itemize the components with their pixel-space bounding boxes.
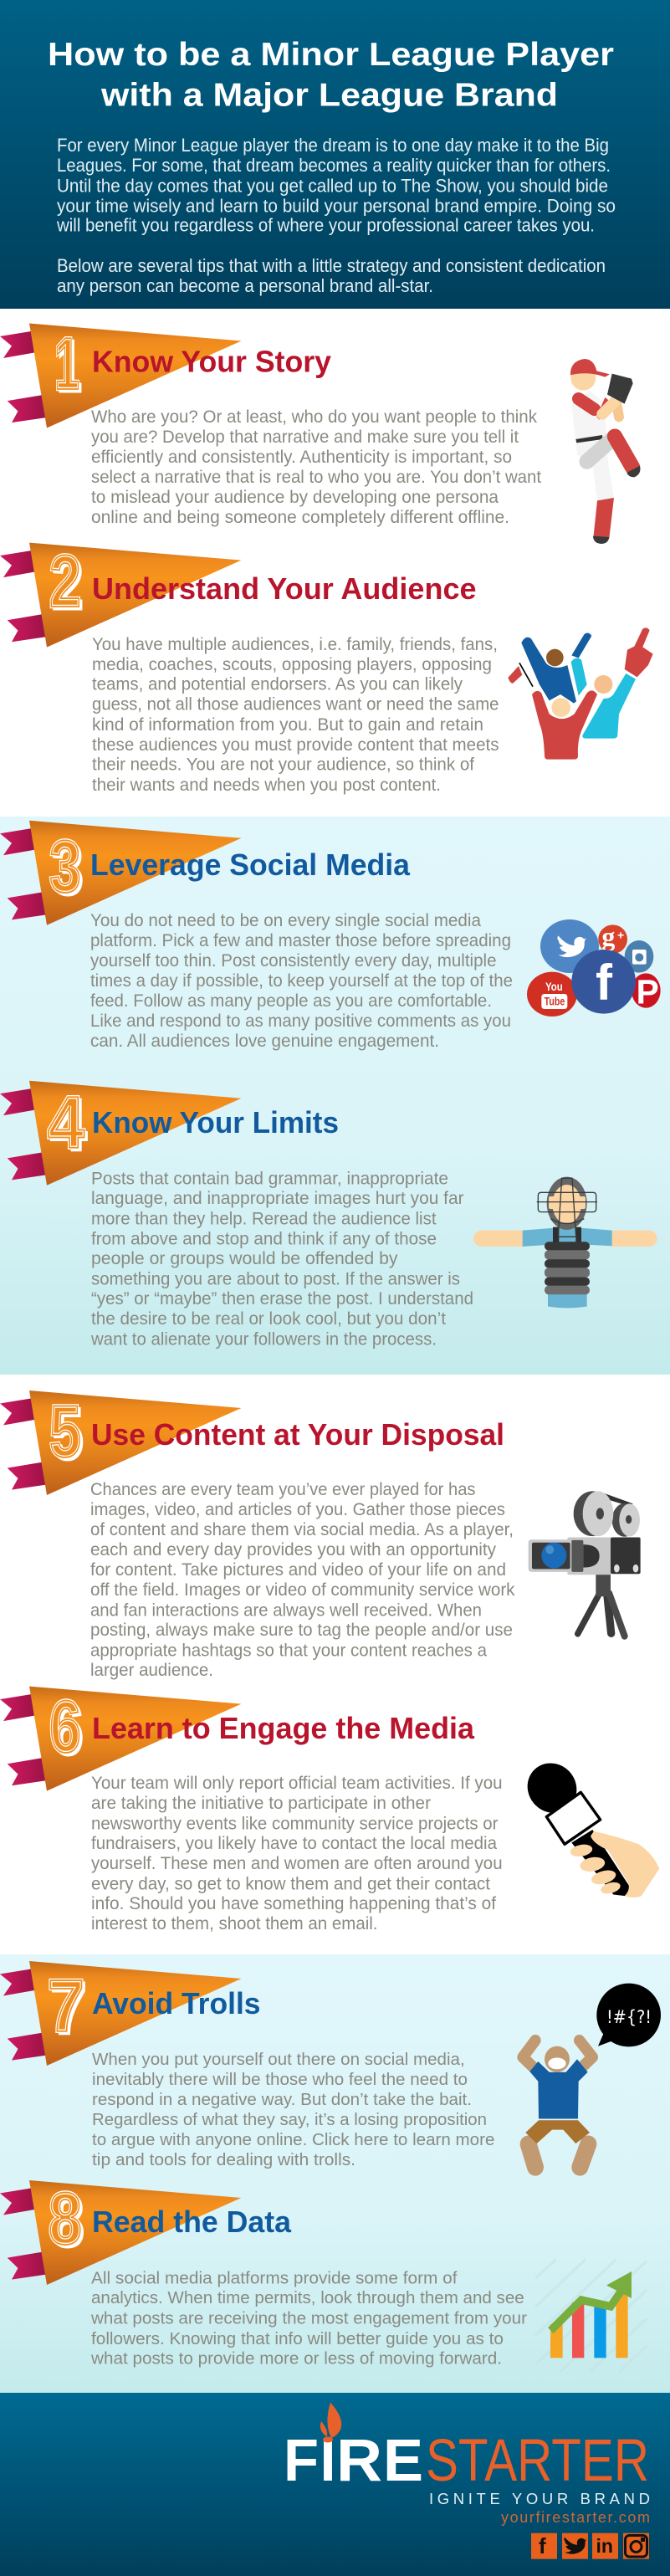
body text: inevitably there will be those who feel the need to (92, 2071, 468, 2089)
pennant with number 4: 4 (48, 1081, 84, 1164)
icon: angry troll with speech bubble: !#{?! (606, 2007, 652, 2027)
icon: cheering fans (508, 627, 653, 760)
body text: their needs. You are not your audience, so think of (92, 755, 474, 775)
body text: the desire to be real or look cool, but you don’t (91, 1308, 446, 1329)
website: yourfirestarter.com (501, 2509, 650, 2526)
tagline: IGNITE YOUR BRAND (429, 2490, 650, 2507)
body text: fundraisers, you likely have to contact the local media (91, 1833, 497, 1853)
intro text: any person can become a personal brand all-star. (57, 275, 433, 296)
pennant with number 8: 8 (49, 2177, 82, 2260)
body text: You have multiple audiences, i.e. family, friends, fans, (92, 634, 498, 654)
body text: people or groups would be offended by (91, 1248, 398, 1268)
intro text: Until the day comes that you get called up to The Show, you should bide (57, 175, 608, 196)
light blue background: tips 3 and 4 (0, 817, 670, 1375)
heading: Leverage Social Media (90, 848, 411, 882)
body text (90, 1479, 515, 1680)
body text: followers. Knowing that info will better guide you as to (91, 2330, 504, 2348)
panel: tip 4 (0, 1081, 657, 1349)
pennant with number 2: 2 (49, 540, 81, 622)
body text: to mislead your audience by developing one persona (91, 487, 499, 507)
body text: larger audience. (90, 1660, 213, 1680)
body text: of content and share them via social media. As a player, (90, 1519, 514, 1539)
light blue background: tips 7 and 8 (0, 1954, 670, 2393)
pennant with number 1 (0, 322, 241, 428)
icon: umpire (473, 1177, 657, 1308)
footer panel (0, 2393, 670, 2576)
logo: Firestarter (284, 2403, 649, 2494)
body text: online and being someone completely different offline. (91, 507, 509, 527)
heading: Use Content at Your Disposal (91, 1417, 504, 1452)
body text: you are? Develop that narrative and make sure you tell it (91, 427, 519, 447)
heading: Avoid Trolls (92, 1986, 261, 2020)
logo: Firestarter: I (320, 2428, 336, 2494)
body text: Posts that contain bad grammar, inappropriate (91, 1168, 448, 1188)
heading: Know Your Limits (92, 1105, 339, 1139)
intro text (56, 135, 616, 296)
pennant with number 6: 6 (49, 1685, 81, 1768)
icon: social media bubbles: + (617, 929, 624, 942)
pennant with number 5: 5 (52, 1392, 84, 1475)
heading: Learn to Engage the Media (92, 1711, 475, 1745)
heading: Know Your Story (92, 345, 331, 379)
body text: guess, not all those audiences want or need the same (92, 694, 499, 714)
pennant with number 5 (0, 1390, 241, 1495)
panel: tip 6 (0, 1685, 659, 1933)
panel: tip 7 (0, 1961, 661, 2169)
icon: social media bubbles: P (637, 972, 659, 1011)
icon: social media bubbles (527, 919, 661, 1017)
body text: When you put yourself out there on social media, (92, 2051, 465, 2069)
body text: something you are about to post. If the answer is (91, 1268, 460, 1288)
intro text: Leagues. For some, that dream becomes a reality quicker than for others. (57, 155, 611, 176)
panel: tip 2 (0, 540, 653, 795)
pennant with number 1: 1 (54, 322, 79, 405)
pennant with number 3: 3 (49, 825, 81, 908)
icon: social media bubbles: You (545, 980, 563, 993)
social icons (531, 2533, 649, 2559)
body text: times a day if possible, to keep yourself at the top of the (90, 970, 513, 991)
body text: interest to them, shoot them an email. (91, 1913, 378, 1933)
body text: off the field. Images or video of community service work (90, 1580, 515, 1600)
intro text: For every Minor League player the dream is to one day make it to the Big (57, 135, 609, 156)
body text: more than they help. Reread the audience list (91, 1208, 437, 1228)
pennant with number 1: 1 (54, 322, 79, 405)
body text: want to alienate your followers in the process. (90, 1329, 437, 1349)
body text: tip and tools for dealing with trolls. (92, 2151, 355, 2169)
body text (92, 634, 499, 795)
body text: what posts are receiving the most engagement from your (90, 2310, 527, 2328)
body text: posting, always make sure to tag the people and/or use (90, 1620, 513, 1640)
body text (90, 1168, 473, 1349)
body text: efficiently and consistently. Authenticity is important, so (91, 447, 512, 467)
body text: media, coaches, scouts, opposing players, opposing (92, 654, 492, 674)
pennant with number 5: 5 (49, 1390, 81, 1472)
body text (90, 2270, 527, 2369)
icon: baseball pitcher (570, 359, 640, 544)
body text: images, video, and articles of you. Gather those pieces (90, 1499, 505, 1519)
body text: All social media platforms provide some form of (91, 2270, 458, 2288)
intro text: will benefit you regardless of where your professional career takes you. (56, 215, 595, 236)
body text: kind of information from you. But to gain and retain (92, 714, 483, 735)
logo: Firestarter: E (383, 2428, 423, 2494)
pennant with number 8 (0, 2177, 241, 2285)
intro text: Below are several tips that with a little strategy and consistent dedication (57, 255, 606, 276)
header panel (0, 0, 670, 309)
body text: select a narrative that is real to who you are. You don’t want (91, 467, 541, 487)
body text: Your team will only report official team activities. If you (91, 1773, 503, 1793)
pennant with number 4: 4 (50, 1083, 87, 1166)
body text: teams, and potential endorsers. As you can likely (92, 674, 463, 694)
panel: tip 1 (0, 322, 640, 544)
icon: microphone in hand (518, 1754, 659, 1897)
heading: Read the Data (92, 2205, 292, 2239)
pennant with number 1: 1 (57, 325, 82, 407)
body text: newsworthy events like community service projects or (91, 1813, 499, 1833)
title: How to be a Minor League Player (48, 37, 614, 73)
body text: yourself too thin. Post consistently every day, multiple (90, 950, 497, 970)
body text: respond in a negative way. But don’t take the bait. (92, 2091, 472, 2109)
body text: for content. Take pictures and video of your life on and (90, 1559, 506, 1580)
pennant with number 8: 8 (51, 2179, 84, 2262)
body text: are taking the initiative to participate in other (91, 1793, 431, 1813)
panel: tip 5 (0, 1390, 641, 1680)
body text: their wants and needs when you post content. (92, 775, 441, 795)
pennant with number 4 (0, 1081, 241, 1186)
body text (92, 2051, 494, 2169)
pennant with number 6 (0, 1685, 241, 1791)
body text: “yes” or “maybe” then erase the post. I understand (91, 1288, 473, 1308)
pennant with number 2: 2 (49, 540, 81, 622)
social icons: in (596, 2535, 613, 2557)
panel: tip 8 (0, 2177, 647, 2372)
body text: each and every day provides you with an opportunity (90, 1539, 496, 1559)
body text (91, 1773, 503, 1933)
body text: yourself. These men and women are often around you (91, 1853, 503, 1873)
pennant with number 7: 7 (48, 1964, 84, 2047)
body text (91, 407, 541, 527)
body text: and fan interactions are always well received. When (90, 1600, 482, 1620)
title (48, 37, 614, 114)
logo: Firestarter: R (336, 2428, 382, 2494)
icon: angry troll with speech bubble (523, 1984, 661, 2167)
pennant with number 5: 5 (49, 1390, 81, 1472)
body text: appropriate hashtags so that your content reaches a (90, 1641, 487, 1661)
pennant with number 7 (0, 1961, 241, 2066)
body text: platform. Pick a few and master those before spreading (90, 930, 511, 950)
body text: language, and inappropriate images hurt you far (91, 1188, 464, 1208)
logo: Firestarter: F (284, 2428, 319, 2494)
body text: Like and respond to as many positive comments as you (90, 1011, 511, 1031)
pennant with number 6: 6 (49, 1685, 81, 1768)
panel: tip 3 (0, 821, 661, 1051)
heading: Understand Your Audience (92, 571, 477, 606)
pennant with number 2: 2 (52, 542, 84, 625)
body text: to argue with anyone online. Click here to learn more (92, 2131, 494, 2149)
pennant with number 7: 7 (48, 1964, 84, 2047)
icon: film camera (529, 1491, 641, 1636)
body text (90, 910, 513, 1051)
body text: Who are you? Or at least, who do you want people to think (91, 407, 537, 427)
body text: You do not need to be on every single social media (90, 910, 481, 930)
body text: can. All audiences love genuine engagement. (90, 1031, 439, 1051)
body text: these audiences you must provide content that meets (92, 735, 499, 755)
pennant with number 3: 3 (52, 827, 84, 910)
body text: every day, so get to know them and get their contact (91, 1873, 490, 1893)
pennant with number 3: 3 (49, 825, 81, 908)
body text: analytics. When time permits, look through them and see (91, 2289, 524, 2307)
pennant with number 3 (0, 821, 241, 925)
body text: from above and stop and think if any of those (91, 1228, 437, 1248)
icon: rising bar chart (535, 2260, 647, 2372)
social icons: f (539, 2533, 546, 2558)
icon: social media bubbles: Tube (545, 995, 565, 1008)
body text: info. Should you have something happening that’s of (91, 1893, 496, 1913)
body text: Chances are every team you’ve ever played for has (90, 1479, 475, 1499)
body text: feed. Follow as many people as you are comfortable. (90, 991, 492, 1011)
body text: Regardless of what they say, it’s a losing proposition (92, 2111, 487, 2129)
icon: social media bubbles: f (596, 955, 613, 1011)
pennant with number 6: 6 (52, 1687, 84, 1770)
icon: social media bubbles: g (601, 921, 615, 951)
pennant with number 2 (0, 540, 241, 648)
pennant with number 7: 7 (50, 1967, 87, 2050)
intro text: your time wisely and learn to build your personal brand empire. Doing so (57, 195, 616, 216)
pennant with number 8: 8 (49, 2177, 82, 2260)
icon: flame (320, 2403, 341, 2438)
title: with a Major League Brand (100, 78, 558, 114)
pennant with number 4: 4 (48, 1081, 84, 1164)
body text: what posts to provide more or less of moving forward. (90, 2350, 502, 2369)
